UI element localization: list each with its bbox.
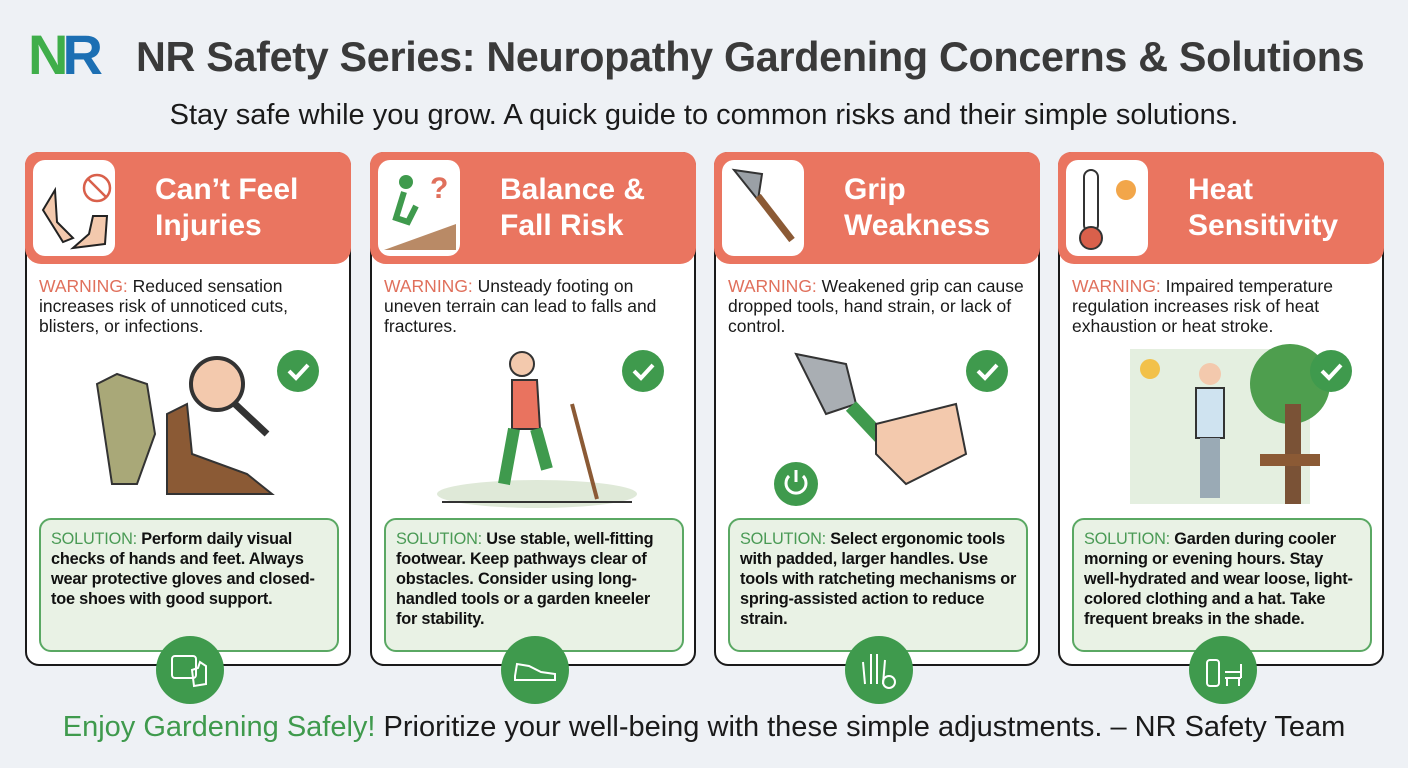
header: Weakness bbox=[844, 209, 990, 242]
solution box bbox=[728, 518, 1028, 652]
solution box bbox=[1072, 518, 1372, 652]
panel: heat sensitivity bbox=[1058, 152, 1384, 666]
solution box bbox=[384, 518, 684, 652]
logo: NR bbox=[28, 23, 97, 86]
solution box: SOLUTION: Use stable, well-fitting footwear. Keep pathways clear of obstacles. Consider using long-handled tools or a garden kneeler for stability. bbox=[396, 530, 653, 628]
subtitle: Stay safe while you grow. A quick guide to common risks and their simple solutions. bbox=[170, 99, 1238, 131]
panel: can't feel injuries bbox=[25, 152, 351, 666]
icon: hand gear bbox=[845, 636, 913, 704]
illustration: person with stick bbox=[437, 351, 637, 508]
header: Injuries bbox=[155, 209, 262, 242]
footer: Enjoy Gardening Safely! Prioritize your well-being with these simple adjustments. – NR Safety Team bbox=[63, 711, 1345, 743]
header bbox=[1058, 152, 1384, 264]
illustration: gardener in shade bbox=[1130, 344, 1330, 504]
panel: grip weakness bbox=[714, 152, 1040, 666]
solution box: SOLUTION: Select ergonomic tools with padded, larger handles. Use tools with ratcheting mechanisms or spring-assisted action to reduce strain. bbox=[740, 530, 1016, 628]
header: Balance & bbox=[500, 173, 645, 206]
check icon bbox=[966, 350, 1008, 392]
illustration: glove, shoe, magnifier bbox=[96, 356, 275, 495]
header: Grip bbox=[844, 173, 906, 206]
header: Heat bbox=[1188, 173, 1253, 206]
check icon bbox=[1310, 350, 1352, 392]
solution box bbox=[39, 518, 339, 652]
warning text: WARNING: Reduced sensation increases risk of unnoticed cuts, blisters, or infections. bbox=[39, 276, 288, 336]
warning text: WARNING: Unsteady footing on uneven terrain can lead to falls and fractures. bbox=[384, 276, 656, 336]
warning text: WARNING: Impaired temperature regulation increases risk of heat exhaustion or heat stroke. bbox=[1072, 276, 1333, 336]
header bbox=[370, 152, 696, 264]
header: ? bbox=[430, 172, 448, 205]
header bbox=[25, 152, 351, 264]
illustration: trowel in hand bbox=[774, 352, 968, 506]
title: NR Safety Series: Neuropathy Gardening Concerns & Solutions bbox=[136, 34, 1364, 80]
icon: shoe bbox=[501, 636, 569, 704]
check icon bbox=[622, 350, 664, 392]
icon: calendar glove bbox=[156, 636, 224, 704]
solution box: SOLUTION: Perform daily visual checks of hands and feet. Always wear protective gloves and closed-toe shoes with good support. bbox=[51, 530, 315, 608]
header: Can’t Feel bbox=[155, 173, 298, 206]
panel: balance & fall risk bbox=[370, 152, 696, 666]
header: Fall Risk bbox=[500, 209, 623, 242]
header bbox=[714, 152, 1040, 264]
solution box: SOLUTION: Garden during cooler morning or evening hours. Stay well-hydrated and wear loose, light-colored clothing and a hat. Take frequent breaks in the shade. bbox=[1084, 530, 1353, 628]
icon: bottle bench bbox=[1189, 636, 1257, 704]
warning text: WARNING: Weakened grip can cause dropped tools, hand strain, or lack of control. bbox=[728, 276, 1024, 336]
check icon bbox=[277, 350, 319, 392]
header: Sensitivity bbox=[1188, 209, 1338, 242]
